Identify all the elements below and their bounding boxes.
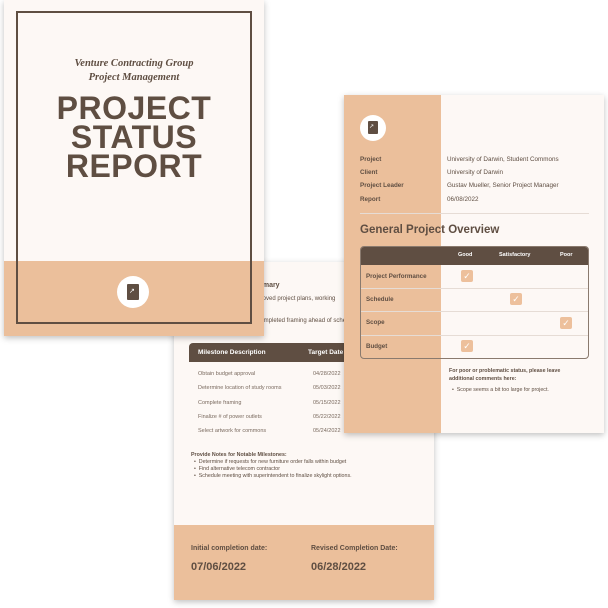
status table: ✓ — [512, 294, 520, 304]
title — [57, 90, 211, 184]
page: overview (right): Gustav Mueller, Senior Project Manager — [447, 182, 559, 189]
page: milestones (middle) — [174, 262, 434, 600]
milestone table: 05/24/2022 — [313, 428, 341, 434]
milestone table: Obtain budget approval — [198, 371, 255, 377]
milestone table: Complete framing — [198, 400, 241, 406]
page: milestones (middle): Completed framing ahead of schedule — [256, 318, 357, 324]
summary heading: Project Summary — [222, 282, 280, 289]
heading: General Project Overview — [360, 224, 499, 236]
page: overview (right): University of Darwin — [447, 169, 503, 176]
page: cover — [4, 0, 264, 336]
comments: For poor or problematic status, please leave — [449, 368, 560, 374]
notes: • Determine if requests for new furniture order falls within budget — [194, 459, 346, 465]
summary text: Approved project plans, working — [250, 296, 335, 302]
status table: ✓ — [463, 341, 471, 351]
project info: Client — [360, 169, 378, 176]
project info: Project — [360, 156, 381, 163]
project info: Project Leader — [360, 182, 404, 189]
page: overview (right): University of Darwin, Student Commons — [447, 156, 559, 163]
comments — [449, 368, 560, 393]
milestone table: Determine location of study rooms — [198, 385, 281, 391]
status table: Project Performance — [366, 273, 427, 280]
icon: report book: ↗ — [129, 288, 135, 295]
milestone table: 04/28/2022 — [313, 371, 341, 377]
project info: Report — [360, 196, 380, 203]
status table — [360, 246, 589, 359]
milestone table: 05/03/2022 — [313, 385, 341, 391]
milestone table: 05/15/2022 — [313, 400, 341, 406]
footer: completion dates: 06/28/2022 — [311, 561, 366, 573]
icon: report book — [117, 276, 149, 308]
status table: Budget — [366, 343, 387, 350]
page: overview (right): 06/08/2022 — [447, 196, 479, 203]
notes: • Schedule meeting with superintendent to finalize skylight options. — [194, 473, 352, 479]
footer: completion dates: 07/06/2022 — [191, 561, 246, 573]
status table: ✓ — [562, 318, 570, 328]
cover footer band — [4, 261, 264, 336]
subtitle: Venture Contracting Group — [74, 58, 194, 69]
notes: Provide Notes for Notable Milestones: — [191, 452, 287, 458]
title: PROJECT — [57, 90, 211, 126]
page: overview (right) — [344, 95, 604, 433]
frame — [16, 11, 252, 324]
milestone table: 05/22/2022 — [313, 414, 341, 420]
icon: ↗ — [369, 124, 374, 130]
notes: • Find alternative telecom contractor — [194, 466, 280, 472]
footer: completion dates: Initial completion date: — [191, 545, 267, 552]
milestone table: Target Date — [308, 349, 343, 356]
subtitle: Project Management — [89, 72, 179, 83]
comments: • Scope seems a bit too large for project. — [452, 387, 549, 393]
footer: completion dates: Revised Completion Date: — [311, 545, 398, 552]
milestone table: Select artwork for commons — [198, 428, 266, 434]
status table: ✓ — [463, 271, 471, 281]
footer: completion dates — [174, 525, 434, 600]
milestone table — [189, 343, 344, 434]
icon — [360, 115, 386, 141]
title: STATUS — [71, 119, 197, 155]
comments: additional comments here: — [449, 376, 516, 382]
project info — [360, 156, 404, 203]
subtitle — [74, 58, 194, 83]
status table: Schedule — [366, 296, 394, 303]
status table: Good — [458, 252, 472, 258]
status table: Satisfactory — [499, 252, 530, 258]
milestone table: Milestone Description — [198, 349, 266, 356]
milestone table: Finalize # of power outlets — [198, 414, 262, 420]
title: REPORT — [66, 148, 202, 184]
status table: Scope — [366, 319, 385, 326]
status table: Poor — [560, 252, 573, 258]
notes — [191, 452, 352, 479]
